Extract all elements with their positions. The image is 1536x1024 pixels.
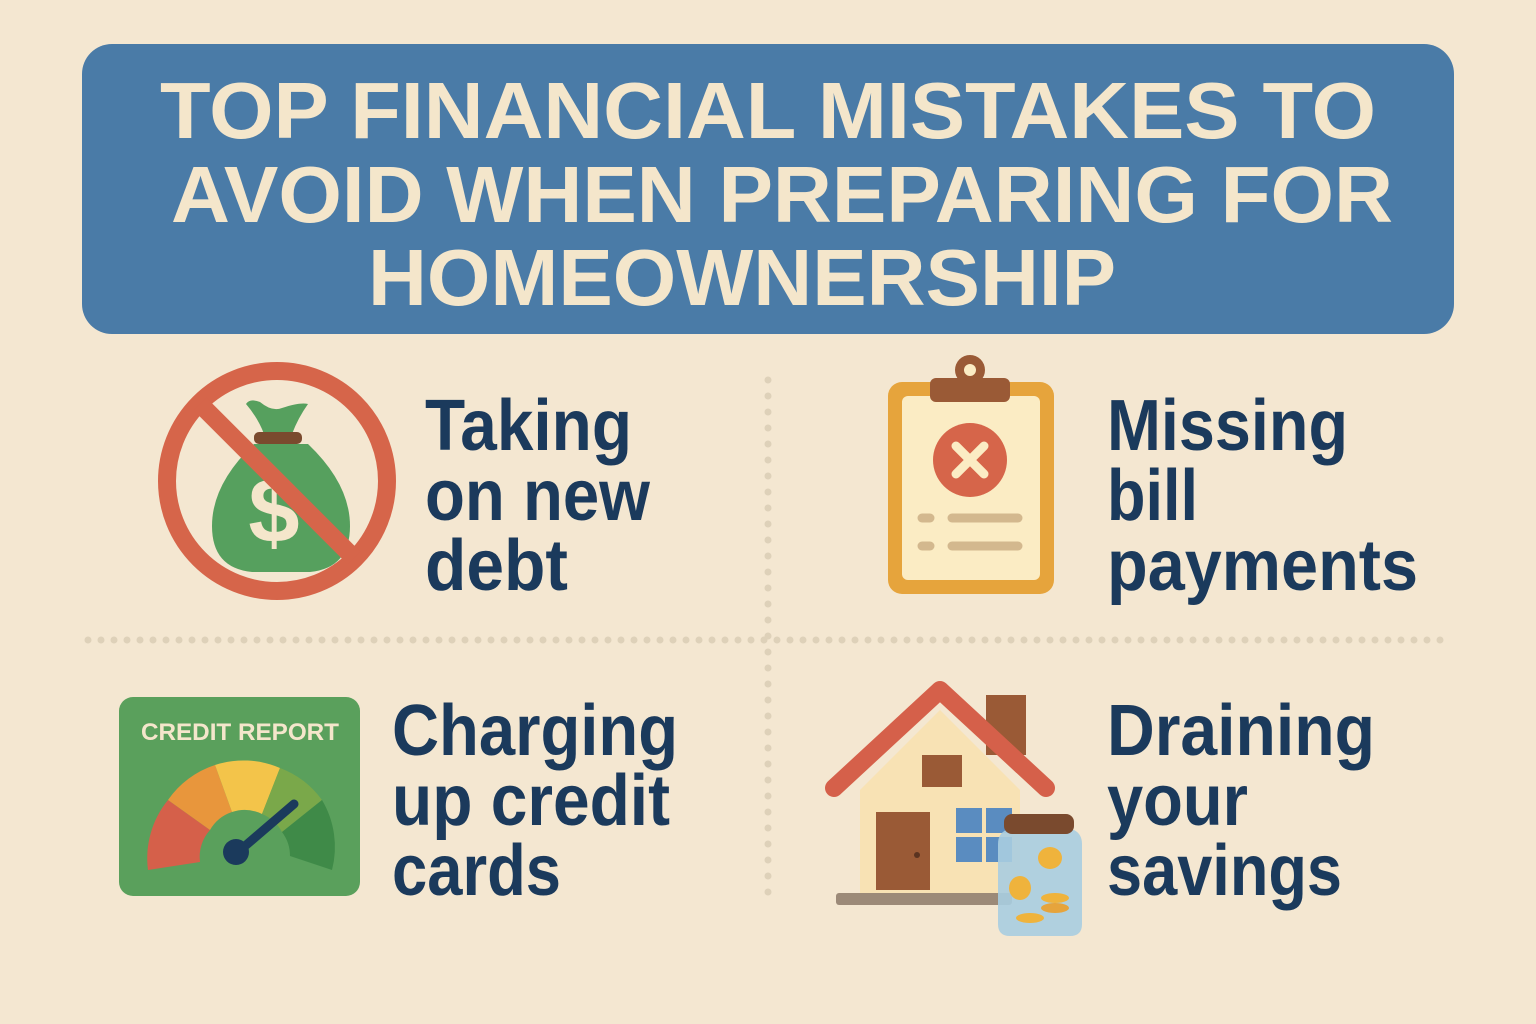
- text: taking on new debt: Taking: [425, 386, 632, 466]
- text: charging up credit cards: cards: [392, 831, 561, 911]
- text: taking on new debt: on new: [425, 456, 651, 536]
- text: taking on new debt: [425, 386, 651, 606]
- icon: no new debt money bag: $: [248, 460, 300, 562]
- icon: credit report gauge: [119, 697, 360, 896]
- title banner: TOP FINANCIAL MISTAKES TO: [160, 66, 1376, 155]
- text: missing bill payments: payments: [1107, 526, 1418, 606]
- text: draining your savings: [1107, 691, 1375, 911]
- icon: house with savings jar: [834, 690, 1082, 936]
- title banner: [82, 44, 1454, 334]
- text: charging up credit cards: [392, 691, 678, 911]
- text: charging up credit cards: up credit: [392, 761, 670, 841]
- icon: credit report gauge: CREDIT REPORT: [141, 719, 339, 746]
- text: charging up credit cards: Charging: [392, 691, 678, 771]
- text: draining your savings: your: [1107, 761, 1248, 841]
- text: taking on new debt: debt: [425, 526, 568, 606]
- text: missing bill payments: [1107, 386, 1418, 606]
- text: missing bill payments: Missing: [1107, 386, 1348, 466]
- icon: clipboard with x: [888, 355, 1054, 594]
- text: missing bill payments: bill: [1107, 456, 1198, 536]
- icon: no new debt money bag: [167, 371, 387, 591]
- title banner: HOMEOWNERSHIP: [368, 233, 1116, 322]
- title banner: AVOID WHEN PREPARING FOR: [171, 150, 1393, 239]
- text: draining your savings: savings: [1107, 831, 1342, 911]
- text: draining your savings: Draining: [1107, 691, 1375, 771]
